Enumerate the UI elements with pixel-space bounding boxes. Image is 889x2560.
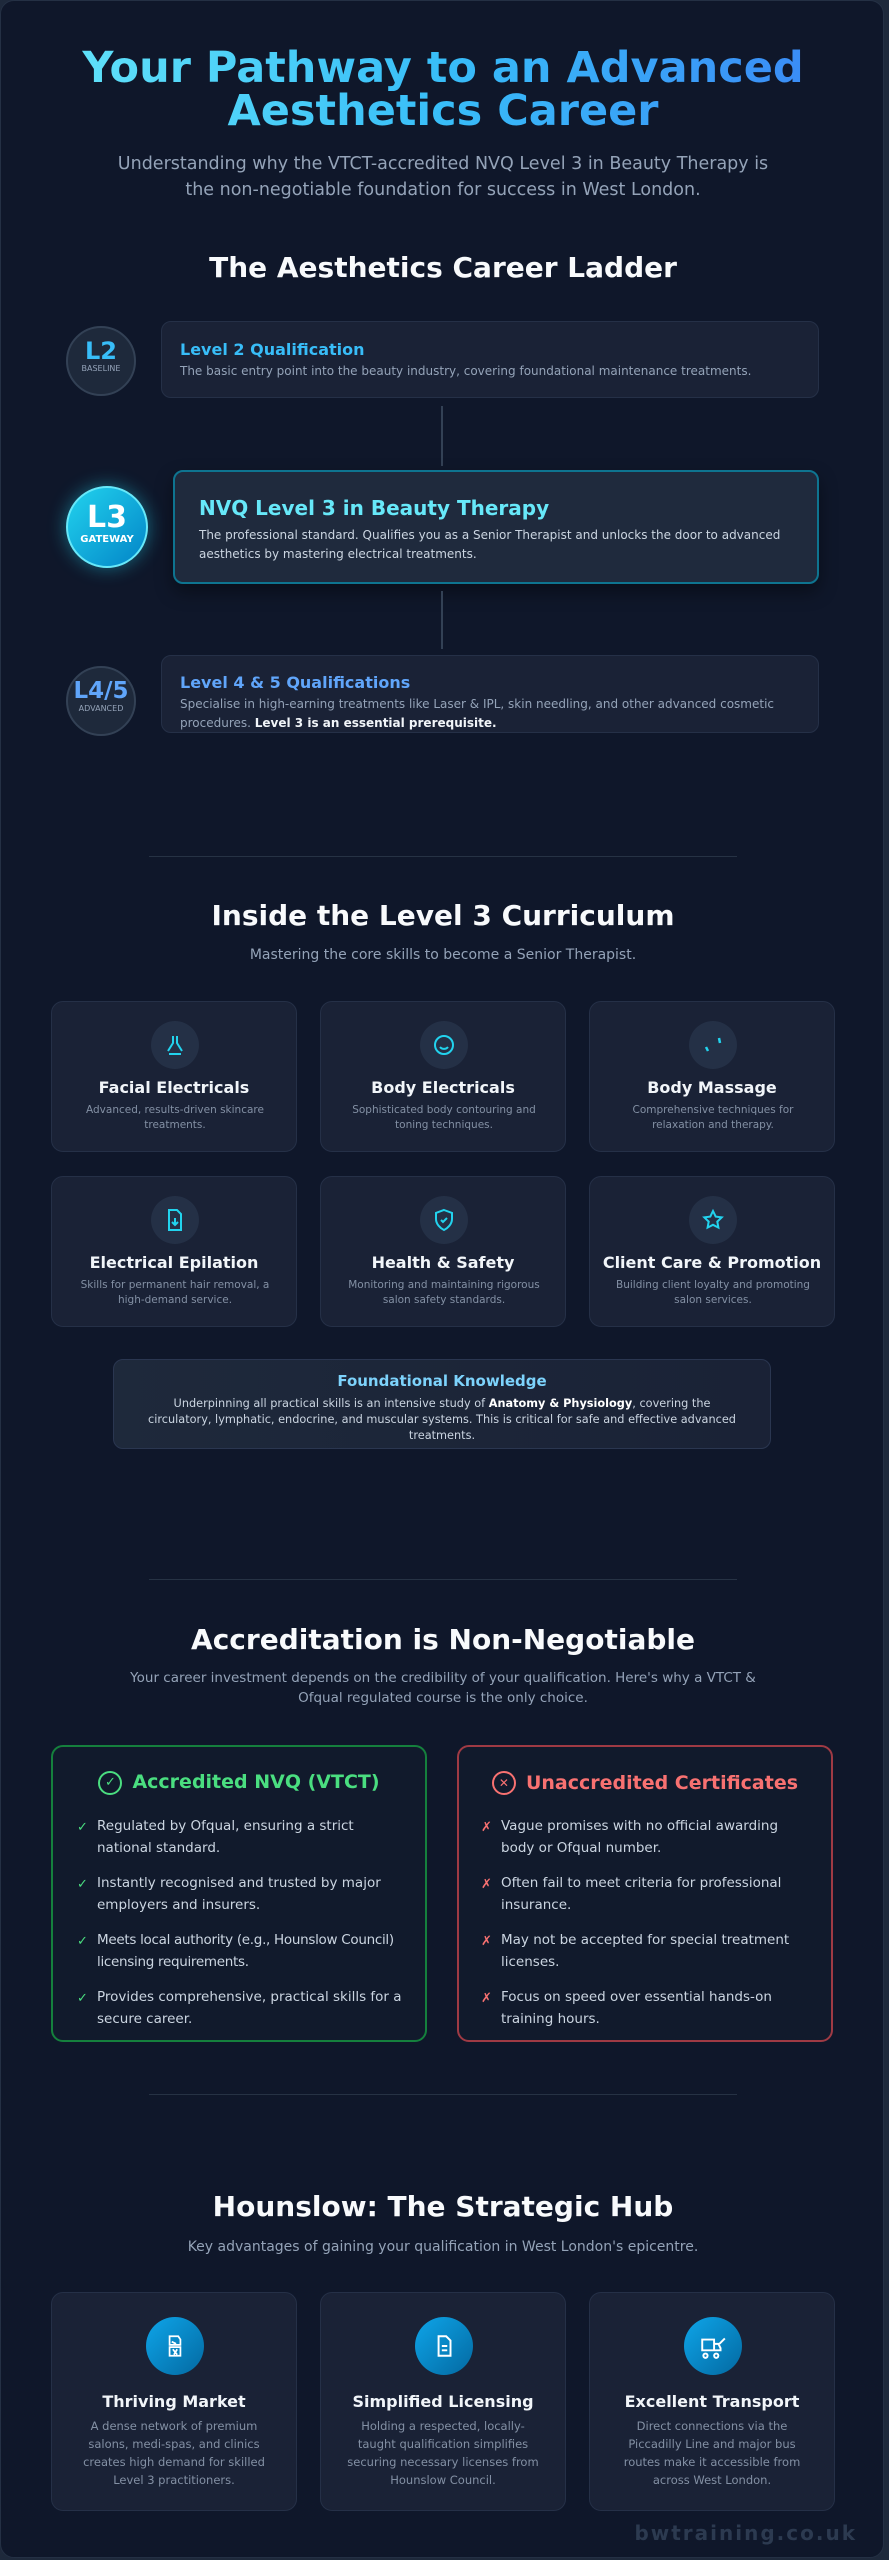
hub card: Simplified Licensing: Holding a respected, locally- [361, 2419, 525, 2433]
badge L2: BASELINE [82, 364, 120, 373]
card L2: The basic entry point into the beauty industry, covering foundational maintenance treatments. [180, 364, 751, 378]
skill card: Electrical Epilation: Skills for permanent hair removal, a high-demand service. [81, 1279, 269, 1306]
hub card: Excellent Transport: routes make it accessible from [624, 2455, 800, 2469]
badge L4/5 [66, 666, 136, 736]
badge L3 [66, 486, 148, 568]
panel: unaccredited: ✗ [481, 1991, 492, 2006]
skill card: Client Care: Building client loyalty and promoting salon services. [616, 1279, 810, 1306]
hub card: Simplified Licensing: Hounslow Council. [390, 2473, 496, 2487]
accreditation subtitle: Ofqual regulated course is the only choice. [298, 1690, 588, 1706]
panel: accredited: secure career. [97, 2011, 192, 2027]
hub card: Excellent Transport: across West London. [653, 2473, 771, 2487]
panel: unaccredited: body or Ofqual number. [501, 1840, 661, 1856]
panel: accredited: national standard. [97, 1840, 220, 1856]
panel: accredited: Meets local authority (e.g., Hounslow Council) [97, 1932, 394, 1948]
ladder step: L4/5 [66, 655, 819, 736]
hub card: Excellent Transport: Direct connections via the [637, 2419, 787, 2433]
card L4/5 [161, 655, 819, 733]
title: Aesthetics Career [227, 86, 659, 136]
panel: accredited [51, 1745, 427, 2042]
skill card: Electrical Epilation: Electrical Epilation [90, 1253, 258, 1272]
panel: accredited: ✓ [77, 1934, 88, 1949]
skill card: Body Electricals: Body Electricals [371, 1078, 515, 1097]
subtitle [118, 154, 768, 200]
panel: accredited: licensing requirements. [97, 1954, 249, 1970]
hub card: Thriving Market [51, 2292, 297, 2511]
hub card: Thriving Market: creates high demand for skilled [83, 2455, 265, 2469]
foundational knowledge box: treatments. [409, 1429, 475, 1442]
card L4/5: Level 4 & 5 Qualifications [180, 673, 410, 692]
badge L4/5: L4/5 [73, 678, 129, 704]
accredited heading: Accredited NVQ (VTCT) [132, 1771, 380, 1793]
skill card: Client Care [589, 1176, 835, 1327]
foundational knowledge box: Underpinning all practical skills is an intensive study of Anatomy & Physiology, covering the [174, 1397, 710, 1410]
hub card: Thriving Market: Thriving Market [102, 2392, 246, 2411]
title: Your Pathway to an Advanced [82, 43, 804, 93]
skill card: Body Electricals: Sophisticated body contouring and toning techniques. [352, 1104, 536, 1131]
skill card: Electrical Epilation [51, 1176, 297, 1327]
hub card: Simplified Licensing: Simplified Licensing [352, 2392, 534, 2411]
panel: accredited: ✓ [77, 1877, 88, 1892]
hub card: Simplified Licensing: taught qualification simplifies [358, 2437, 528, 2451]
hub card: Thriving Market: A dense network of premium [91, 2419, 257, 2433]
panel: unaccredited: insurance. [501, 1897, 571, 1913]
panel: accredited: ✓ [77, 1991, 88, 2006]
panel: unaccredited: Vague promises with no official awarding [501, 1818, 778, 1834]
panel: unaccredited [457, 1745, 833, 2042]
hub card: Excellent Transport [589, 2292, 835, 2511]
panel: unaccredited: ✗ [481, 1820, 492, 1835]
subtitle: Understanding why the VTCT-accredited NVQ Level 3 in Beauty Therapy is [118, 154, 768, 174]
heading: career ladder: The Aesthetics Career Ladder [209, 251, 677, 284]
badge L3: L3 [87, 500, 127, 535]
card L2: Level 2 Qualification [180, 340, 364, 359]
accreditation subtitle: Your career investment depends on the credibility of your qualification. Here's why a VTCT & [130, 1670, 756, 1686]
skill card: Body Electricals [320, 1001, 566, 1152]
foundational knowledge box [113, 1359, 771, 1449]
skill card: Body Massage [589, 1001, 835, 1152]
accredited heading: ✓ [105, 1775, 116, 1790]
panel: accredited: Instantly recognised and trusted by major [97, 1875, 381, 1891]
panel: accredited: Provides comprehensive, practical skills for a [97, 1989, 402, 2005]
card L3: The professional standard. Qualifies you as a Senior Therapist and unlocks the door to advanced aesthetics by mastering electrical treatments. [199, 528, 780, 561]
skill card: Health & Safety: Health & Safety [372, 1253, 514, 1272]
unaccredited heading: Unaccredited Certificates [526, 1772, 798, 1794]
badge L2: L2 [85, 337, 117, 365]
ladder step: L2 [66, 321, 819, 398]
panel: accredited: Regulated by Ofqual, ensuring a strict [97, 1818, 354, 1834]
skill card: Facial Electricals: Advanced, results-driven skincare treatments. [86, 1104, 264, 1131]
skill card: Health & Safety [320, 1176, 566, 1327]
panel: unaccredited: training hours. [501, 2011, 600, 2027]
hub card: Simplified Licensing: securing necessary licenses from [347, 2455, 539, 2469]
skill card: Facial Electricals [51, 1001, 297, 1152]
panel: unaccredited: ✗ [481, 1934, 492, 1949]
skill card: Body Massage: Comprehensive techniques for relaxation and therapy. [633, 1104, 793, 1131]
skill card: Client Care: Client Care & Promotion [603, 1253, 821, 1272]
unaccredited heading: ✕ [499, 1776, 509, 1790]
foundational knowledge box: circulatory, lymphatic, endocrine, and muscular systems. This is critical for safe and effective advanced [148, 1413, 736, 1426]
hub card: Thriving Market: salons, medi-spas, and clinics [88, 2437, 260, 2451]
panel: accredited: employers and insurers. [97, 1897, 260, 1913]
heading: accreditation: Accreditation is Non-Negotiable [191, 1623, 695, 1656]
card L3 [173, 470, 819, 584]
panel: accredited: ✓ [77, 1820, 88, 1835]
panel: unaccredited: May not be accepted for special treatment [501, 1932, 789, 1948]
skill card: Facial Electricals: Facial Electricals [99, 1078, 249, 1097]
skill card: Body Massage: Body Massage [647, 1078, 777, 1097]
foundational knowledge box: Foundational Knowledge [337, 1372, 547, 1390]
badge L3: GATEWAY [80, 534, 134, 545]
hounslow subtitle: Key advantages of gaining your qualification in West London's epicentre. [188, 2239, 698, 2255]
panel: unaccredited: Focus on speed over essential hands-on [501, 1989, 772, 2005]
hub card: Excellent Transport: Piccadilly Line and major bus [628, 2437, 796, 2451]
watermark: bwtraining.co.uk [634, 2521, 857, 2545]
hub card: Thriving Market: Level 3 practitioners. [113, 2473, 235, 2487]
ladder step: L3 [56, 470, 820, 592]
panel: unaccredited: licenses. [501, 1954, 559, 1970]
heading: curriculum: Inside the Level 3 Curriculum [211, 899, 675, 932]
subtitle: the non-negotiable foundation for success in West London. [185, 180, 701, 200]
title [1, 47, 885, 133]
skill card: Health & Safety: Monitoring and maintaining rigorous salon safety standards. [348, 1279, 540, 1306]
card L3: NVQ Level 3 in Beauty Therapy [199, 496, 549, 520]
heading: hounslow: Hounslow: The Strategic Hub [213, 2190, 673, 2223]
panel: unaccredited: Often fail to meet criteria for professional [501, 1875, 781, 1891]
badge L2 [66, 326, 136, 396]
hub card: Excellent Transport: Excellent Transport [625, 2392, 799, 2411]
panel: unaccredited: ✗ [481, 1877, 492, 1892]
card L4/5: Specialise in high-earning treatments like Laser & IPL, skin needling, and other advanced cosmetic procedures. Level 3 is an essential prerequisite. [180, 697, 774, 730]
accreditation subtitle [130, 1670, 756, 1706]
curriculum subtitle: Mastering the core skills to become a Senior Therapist. [250, 947, 636, 963]
hub card: Simplified Licensing [320, 2292, 566, 2511]
card L2 [161, 321, 819, 398]
badge L4/5: ADVANCED [79, 704, 123, 713]
